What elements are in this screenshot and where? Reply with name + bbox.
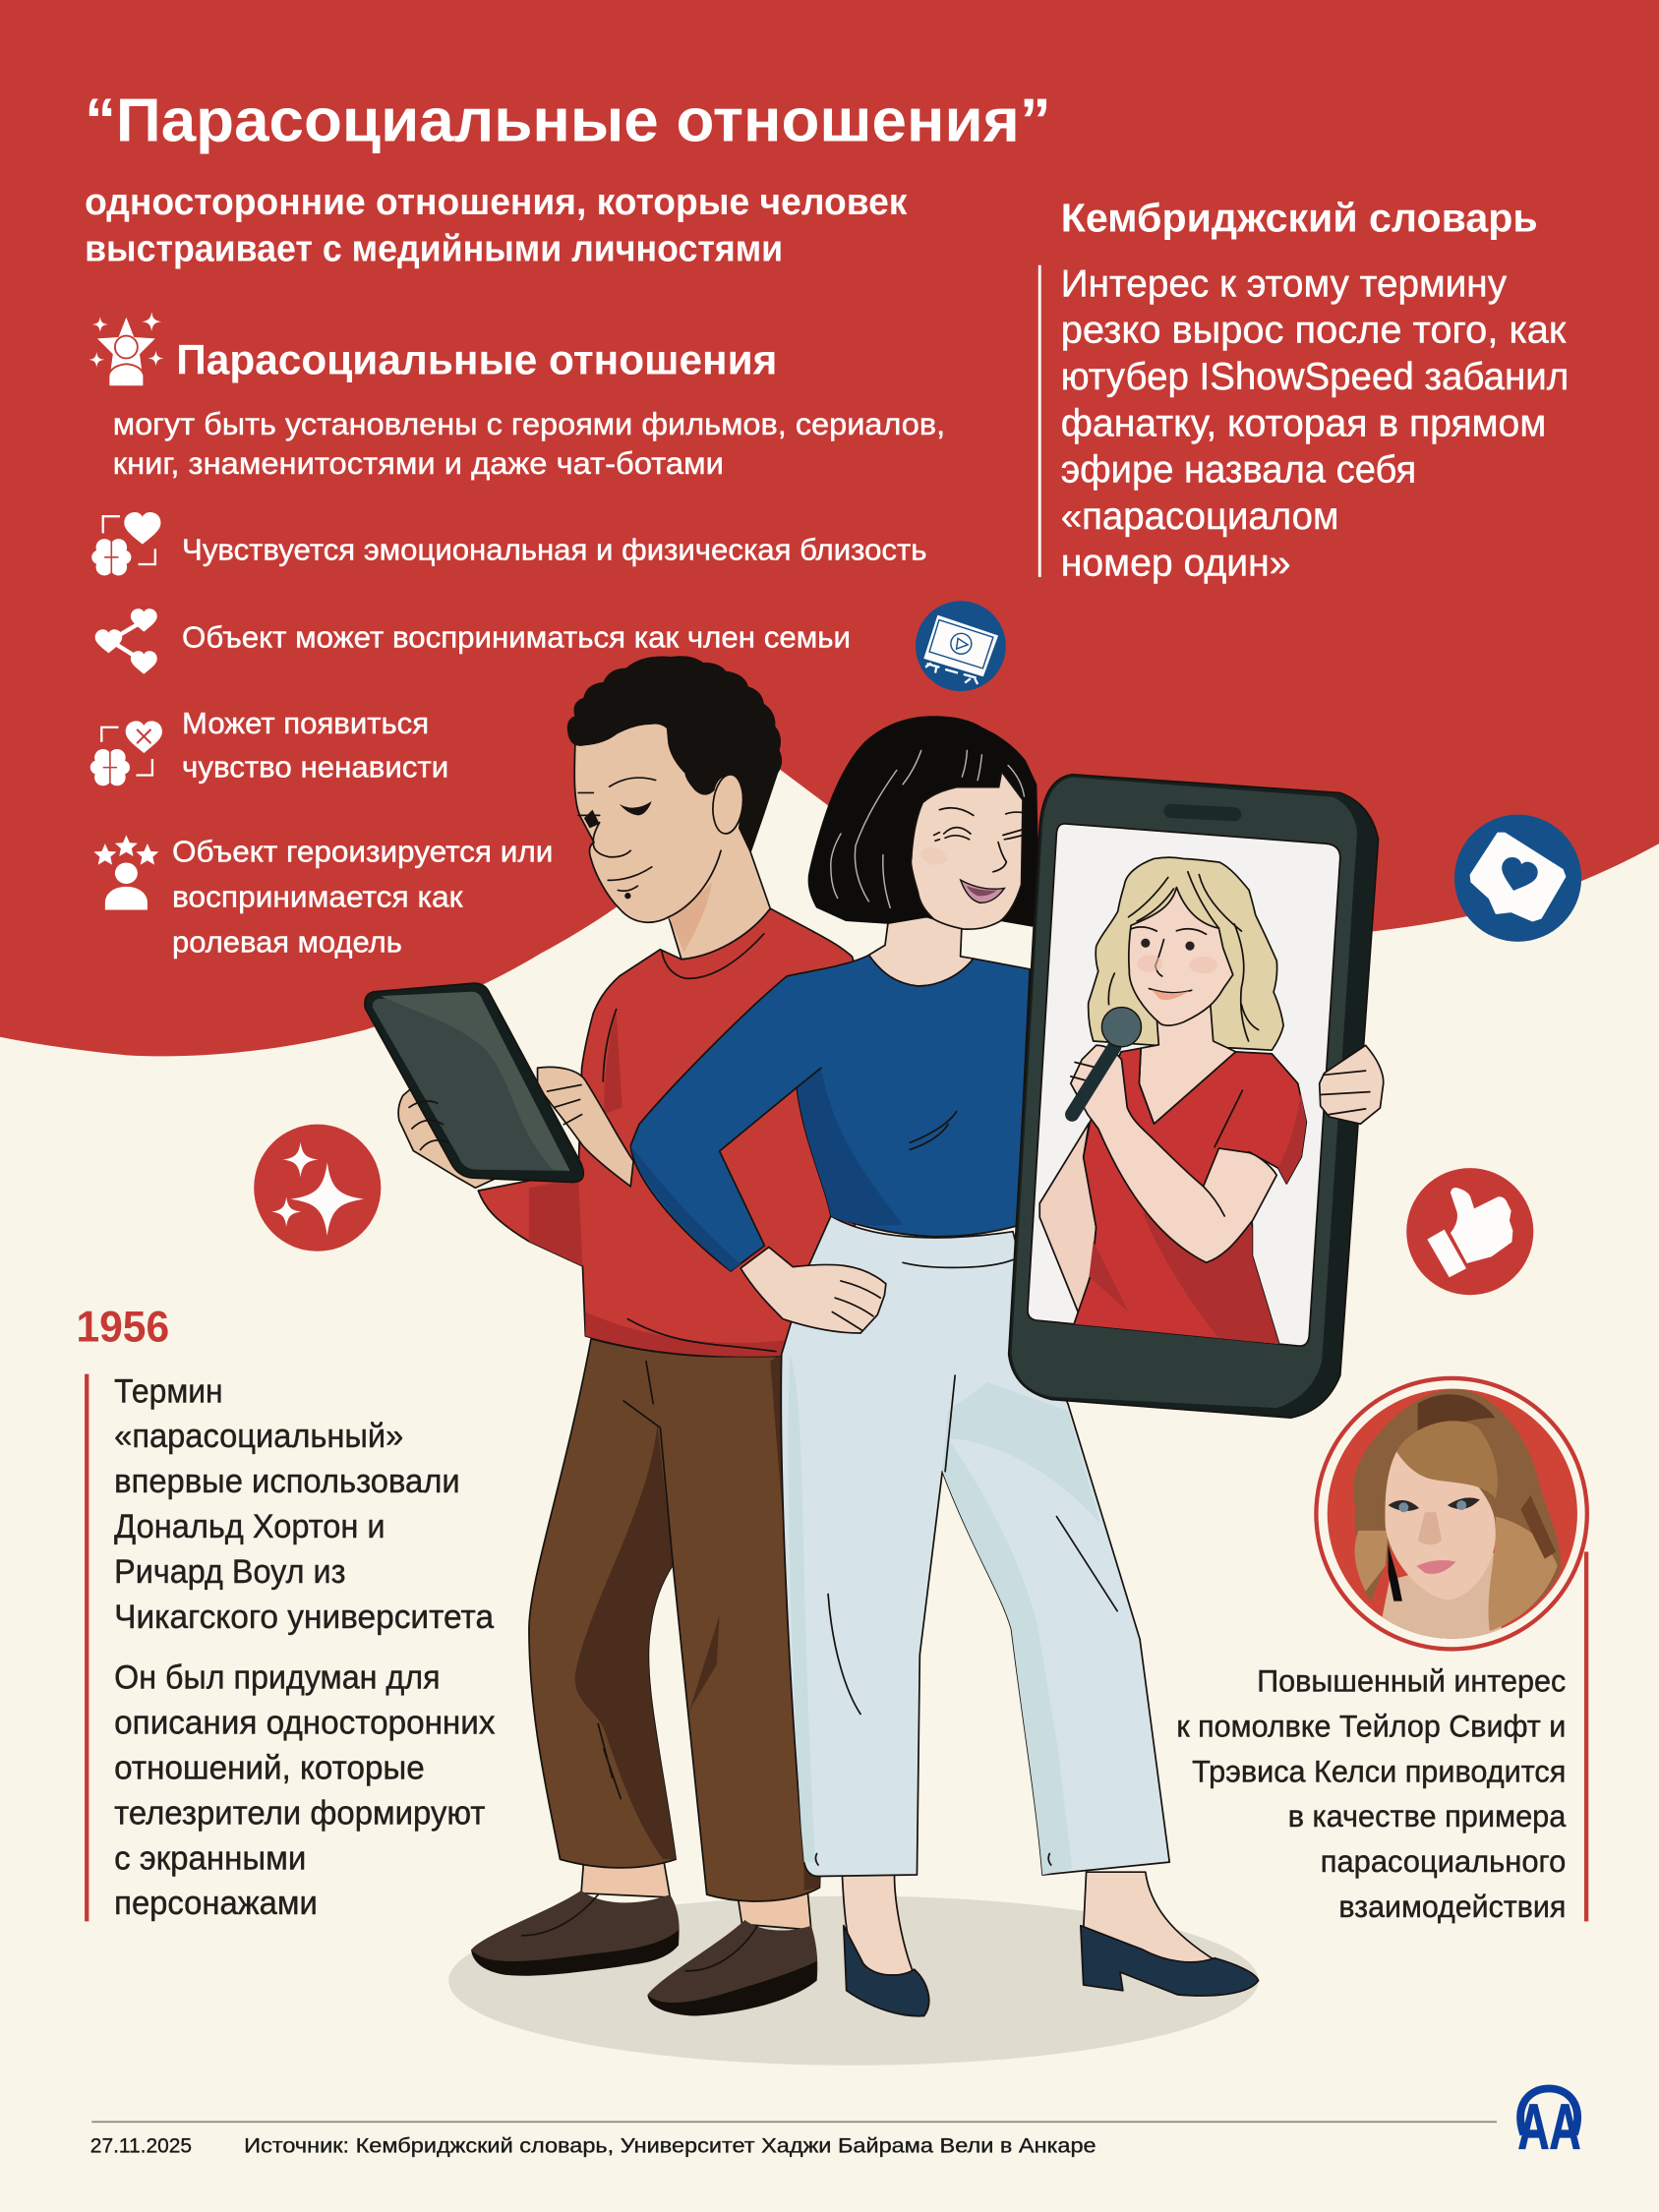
text block: dictionary note: «парасоциалом xyxy=(1061,495,1338,538)
text block: origin of the term: «парасоциальный» xyxy=(114,1418,403,1455)
illustration: two people with devices xyxy=(365,657,1384,2016)
logo: AA: AA xyxy=(1518,2091,1580,2162)
chart: ground shadow xyxy=(448,1896,1259,2066)
text: hate: чувство ненависти xyxy=(182,752,448,785)
man: right hand and forearm xyxy=(538,1067,633,1187)
footer: source: Источник: Кембриджский словарь, Университет Хаджи Байрама Вели в Анкаре xyxy=(244,2135,1096,2158)
woman: hand on hip xyxy=(741,1247,886,1333)
singer: left arm xyxy=(1039,1123,1096,1314)
text block: origin of the term: персонажами xyxy=(114,1885,318,1922)
text: hate: Может появиться xyxy=(182,708,429,740)
woman: hand holding phone xyxy=(1320,1045,1384,1124)
text block: Swift and Kelce: взаимодействия xyxy=(1338,1889,1566,1924)
text: hate xyxy=(182,708,448,785)
text: role model: ролевая модель xyxy=(172,927,402,960)
title: “Парасоциальные отношения” xyxy=(85,87,1051,154)
text: role model: Объект героизируется или xyxy=(172,837,553,869)
text block: dictionary note: ютубер IShowSpeed забанил xyxy=(1061,356,1569,398)
text block: Swift and Kelce: парасоциального xyxy=(1321,1843,1566,1879)
icon: heart badge xyxy=(1454,815,1581,942)
text block: origin of the term: телезрители формируют xyxy=(114,1794,486,1832)
heading: Cambridge dictionary: Кембриджский словарь xyxy=(1061,195,1538,240)
singer: face xyxy=(1129,888,1233,1025)
text block: dictionary note: резко вырос после того, как xyxy=(1061,310,1567,352)
text block: intro: могут быть установлены с героями фильмов, сериалов, xyxy=(113,406,945,441)
man: head and neck xyxy=(567,657,781,960)
singer: blond hair xyxy=(1089,857,1283,1050)
text block: origin of the term xyxy=(114,1372,496,1922)
singer: raised arm and hand xyxy=(1071,1045,1276,1262)
logo: AA xyxy=(1518,2088,1580,2162)
text block: origin of the term: Термин xyxy=(114,1372,223,1410)
text block: origin of the term: Ричард Воул из xyxy=(114,1553,345,1591)
icon: celebrity star xyxy=(89,312,163,386)
text: family member: Объект может восприниматься как член семьи xyxy=(182,622,851,655)
woman: hair and face xyxy=(808,716,1039,930)
text block: Swift and Kelce: Повышенный интерес xyxy=(1257,1662,1566,1699)
text block: intro xyxy=(113,406,945,481)
text block: Swift and Kelce xyxy=(1176,1662,1567,1924)
text block: origin of the term: Он был придуман для xyxy=(114,1659,441,1697)
text block: Swift and Kelce: Трэвиса Келси приводится xyxy=(1192,1753,1566,1788)
text block: dictionary note: номер один» xyxy=(1061,542,1291,584)
man: legs and trousers xyxy=(529,1339,821,1930)
text block: origin of the term: Чикагского университета xyxy=(114,1599,495,1636)
icon: brain and crossed heart xyxy=(90,721,162,786)
footer: date: 27.11.2025 xyxy=(90,2135,192,2158)
year: 1956 xyxy=(76,1304,169,1352)
subtitle: односторонние отношения, которые человек xyxy=(85,182,908,223)
text block: origin of the term: с экранными xyxy=(114,1839,306,1877)
singer: red dress xyxy=(1072,1048,1306,1347)
singer on phone screen xyxy=(1039,857,1306,1347)
man: curly hair xyxy=(567,657,781,852)
text block: origin of the term: описания односторонних xyxy=(114,1705,496,1742)
text block: origin of the term: Дональд Хортон и xyxy=(114,1508,385,1545)
text block: dictionary note: Интерес к этому термину xyxy=(1061,262,1508,305)
heading: parasocial relations: Парасоциальные отношения xyxy=(176,336,777,382)
man: finger details xyxy=(409,1084,582,1149)
text block: dictionary note: фанатку, которая в прямом xyxy=(1061,402,1546,444)
phone xyxy=(1009,775,1379,1418)
text block: Swift and Kelce: в качестве примера xyxy=(1288,1798,1567,1834)
background: red curved header xyxy=(0,0,1659,1056)
man: shoes xyxy=(471,1891,817,2016)
portrait: Taylor Swift xyxy=(1316,1378,1587,1651)
text: emotional closeness: Чувствуется эмоциональная и физическая близость xyxy=(182,535,926,567)
woman: neck xyxy=(868,917,974,986)
icon: brain and heart xyxy=(91,512,160,575)
text block: intro: книг, знаменитостями и даже чат-ботами xyxy=(113,445,724,481)
icon: sparkle badge xyxy=(254,1125,381,1252)
subtitle: выстраивает с медийными личностями xyxy=(85,228,783,269)
text block: origin of the term: отношений, которые xyxy=(114,1749,425,1786)
text block: dictionary note: эфире назвала себя xyxy=(1061,449,1416,492)
microphone xyxy=(1072,1008,1142,1115)
text block: dictionary note xyxy=(1061,262,1569,584)
man: left hand behind tablet xyxy=(398,1075,497,1188)
woman: blue shirt xyxy=(630,955,1030,1271)
panel: 1956 history xyxy=(76,1304,496,1922)
woman: feet and navy shoes xyxy=(842,1872,1259,2016)
subtitle xyxy=(85,182,908,269)
icon: family hearts xyxy=(95,609,157,674)
woman: light trousers xyxy=(781,1216,1169,1876)
text block: origin of the term: впервые использовали xyxy=(114,1463,460,1500)
man: red sweater xyxy=(478,908,903,1357)
tablet xyxy=(365,983,583,1182)
text: role model: воспринимается как xyxy=(172,882,463,914)
icon: thumbs up badge xyxy=(1406,1168,1533,1295)
singer: neck and chest xyxy=(1139,1005,1236,1124)
icon: TV badge xyxy=(916,601,1006,691)
text: role model xyxy=(172,837,553,960)
icon: person with stars xyxy=(93,835,158,910)
panel: Cambridge dictionary xyxy=(1038,195,1569,584)
text block: Swift and Kelce: к помолвке Тейлор Свифт и xyxy=(1176,1708,1566,1743)
